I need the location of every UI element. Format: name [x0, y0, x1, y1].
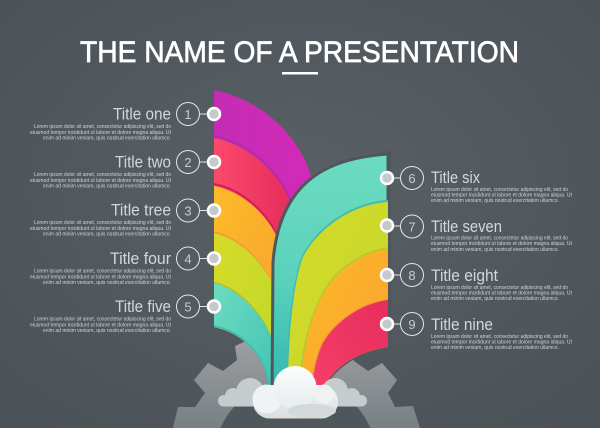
- right item 7: [381, 215, 572, 253]
- ribbon: yellow: [214, 233, 272, 392]
- left item 2: Title two: [115, 154, 171, 172]
- right item 9: [381, 312, 572, 351]
- right item 6: Title six: [431, 169, 481, 187]
- left item 2: [30, 150, 220, 190]
- right item 9: Title nine: [431, 316, 493, 334]
- left item 2: enim ad minim veniam, quis nostrud exercitation ullamco.: [43, 184, 171, 190]
- ribbon: magenta: [214, 90, 312, 392]
- right item 9: eiusmod tempor incididunt ut labore et dolore magna aliqua. Ut: [431, 340, 572, 346]
- right item 9: enim ad minim veniam, quis nostrud exercitation ullamco.: [431, 345, 559, 351]
- left item 3: eiusmod tempor incididunt ut labore et dolore magna aliqua. Ut: [30, 226, 171, 232]
- ribbon: teal: [214, 283, 272, 392]
- border strip over old stroke on right edge: [388, 150, 391, 350]
- ribbon: teal: [272, 154, 388, 396]
- left item 2: 2: [184, 155, 192, 170]
- ribbon: orange: [300, 249, 388, 396]
- title underline: [282, 72, 318, 74]
- left item 1: Title one: [113, 106, 171, 124]
- left item 2: eiusmod tempor incididunt ut labore et dolore magna aliqua. Ut: [30, 178, 171, 184]
- left item 4: eiusmod tempor incididunt ut labore et dolore magna aliqua. Ut: [30, 274, 171, 280]
- right item 7: eiusmod tempor incididunt ut labore et dolore magna aliqua. Ut: [431, 241, 572, 247]
- right item 6: 6: [408, 171, 416, 186]
- right item 8: Lorem ipsum dolor sit amet, consectetur adipiscing elit, sed do: [431, 285, 568, 291]
- right fan of ribbons: [272, 150, 391, 396]
- ribbon: orange: [214, 186, 278, 392]
- left item 5: Lorem ipsum dolor sit amet, consectetur adipiscing elit, sed do: [34, 316, 171, 322]
- left item 4: [30, 247, 220, 286]
- right item 6: eiusmod tempor incididunt ut labore et dolore magna aliqua. Ut: [431, 192, 572, 198]
- ribbon: red: [311, 300, 388, 396]
- left item 3: Lorem ipsum dolor sit amet, consectetur adipiscing elit, sed do: [34, 220, 171, 226]
- right item 9: 9: [408, 317, 416, 332]
- left item 5: Title five: [115, 298, 171, 316]
- right item 6: enim ad minim veniam, quis nostrud exercitation ullamco.: [431, 198, 559, 204]
- right item 8: eiusmod tempor incididunt ut labore et dolore magna aliqua. Ut: [431, 290, 572, 296]
- right item 8: Title eight: [431, 267, 498, 285]
- left item 3: enim ad minim veniam, quis nostrud exercitation ullamco.: [43, 232, 171, 238]
- left item 1: eiusmod tempor incididunt ut labore et dolore magna aliqua. Ut: [30, 130, 171, 136]
- ribbon: yellow: [288, 202, 388, 396]
- right item 8: [381, 264, 572, 302]
- left item 4: 4: [184, 252, 192, 266]
- right item 7: enim ad minim veniam, quis nostrud exercitation ullamco.: [431, 247, 559, 253]
- left item 4: Lorem ipsum dolor sit amet, consectetur adipiscing elit, sed do: [34, 268, 171, 274]
- icon: gear: [173, 341, 420, 428]
- right item 8: 8: [408, 268, 416, 283]
- title: THE NAME OF A PRESENTATION: [80, 36, 519, 69]
- left item 1: Lorem ipsum dolor sit amet, consectetur adipiscing elit, sed do: [34, 124, 171, 130]
- left item 3: Title tree: [111, 202, 171, 220]
- left fan of ribbons: [214, 90, 312, 392]
- left item 1: [30, 102, 220, 142]
- right item 6: Lorem ipsum dolor sit amet, consectetur adipiscing elit, sed do: [431, 187, 568, 193]
- icon: back cloud: [218, 378, 367, 406]
- left item 3: 3: [184, 204, 192, 218]
- left item 3: [30, 199, 220, 238]
- right item 6: [381, 166, 572, 204]
- right item 9: Lorem ipsum dolor sit amet, consectetur adipiscing elit, sed do: [431, 334, 568, 340]
- left item 5: 5: [184, 300, 192, 314]
- left item 5: [30, 295, 220, 334]
- right item 7: Lorem ipsum dolor sit amet, consectetur adipiscing elit, sed do: [431, 236, 568, 242]
- left item 4: enim ad minim veniam, quis nostrud exercitation ullamco.: [43, 280, 171, 286]
- right item 7: 7: [408, 220, 416, 234]
- left item 5: enim ad minim veniam, quis nostrud exercitation ullamco.: [43, 328, 171, 334]
- left item 1: 1: [184, 107, 192, 122]
- left item 5: eiusmod tempor incididunt ut labore et dolore magna aliqua. Ut: [30, 322, 171, 328]
- icon: front cloud: [252, 366, 338, 418]
- left item 2: Lorem ipsum dolor sit amet, consectetur adipiscing elit, sed do: [34, 172, 171, 178]
- left item 1: enim ad minim veniam, quis nostrud exercitation ullamco.: [43, 136, 171, 142]
- right item 7: Title seven: [431, 218, 502, 236]
- right item 8: enim ad minim veniam, quis nostrud exercitation ullamco.: [431, 296, 559, 302]
- ribbon: red: [214, 138, 292, 392]
- left item 4: Title four: [110, 250, 171, 268]
